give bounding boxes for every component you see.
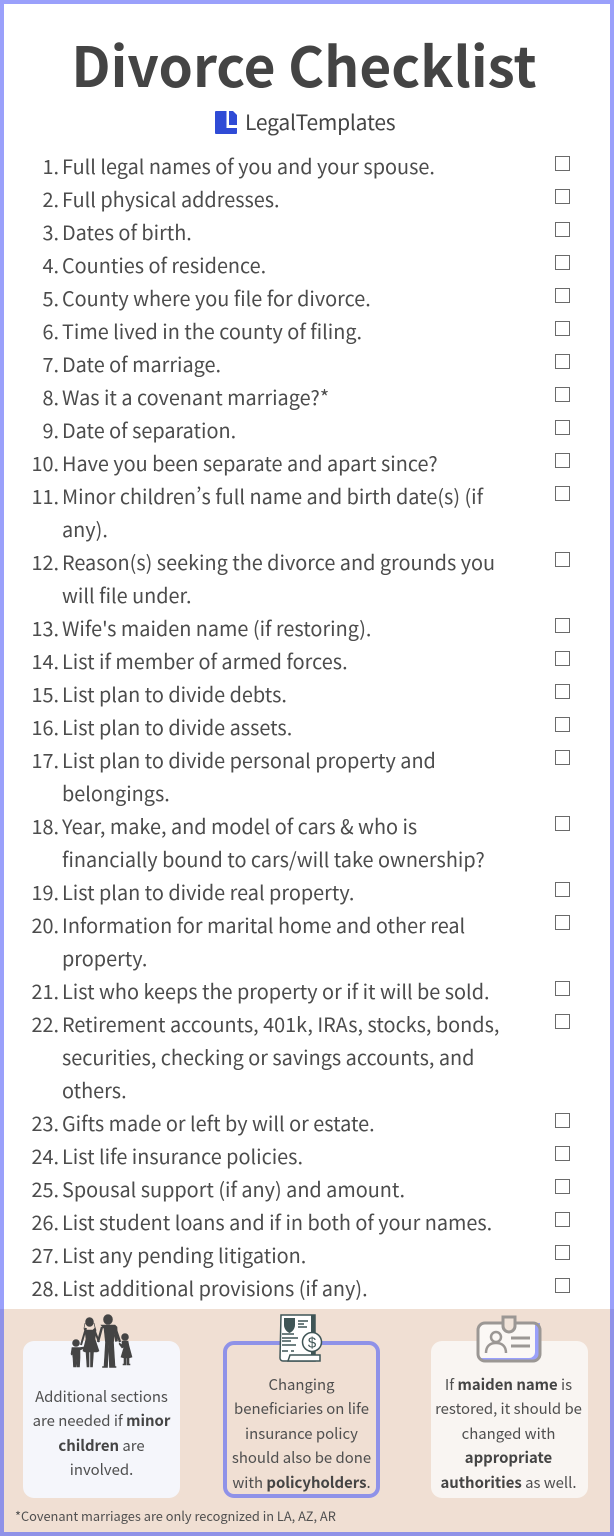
item 2 [42, 184, 570, 213]
checklist: 26. [31, 1207, 59, 1236]
checklist: Time lived in the county of filing. [62, 316, 362, 345]
item 10 [31, 448, 570, 477]
checklist: Counties of residence. [62, 250, 266, 279]
checklist: 9. [42, 415, 59, 444]
title: Divorce Checklist [71, 23, 537, 103]
item 12 [31, 547, 570, 609]
text: maiden name: restored, it should be [435, 1398, 582, 1419]
checklist: List any pending litigation. [62, 1240, 306, 1269]
checklist: List plan to divide debts. [62, 679, 287, 708]
checklist: Have you been separate and apart since? [62, 448, 438, 477]
checklist: Spousal support (if any) and amount. [62, 1174, 405, 1203]
text: beneficiaries: Changing [268, 1374, 334, 1394]
checklist: Reason(s) seeking the divorce and grounds you [62, 547, 495, 576]
icon: logo mark [215, 111, 237, 134]
text: beneficiaries: insurance policy [245, 1422, 358, 1444]
panel: bottom notes [0, 1309, 614, 1536]
checklist: 11. [31, 481, 59, 510]
checklist: Date of marriage. [62, 349, 221, 378]
checklist: financially bound to cars/will take ownership? [62, 844, 485, 873]
checklist: 2. [42, 184, 59, 213]
text: maiden name [435, 1374, 582, 1492]
text: beneficiaries: with policyholders. [232, 1472, 371, 1492]
item 28 [31, 1273, 570, 1302]
checklist: Wife's maiden name (if restoring). [62, 613, 371, 642]
item 18 [31, 811, 570, 873]
checklist: 25. [31, 1174, 59, 1203]
checklist: securities, checking or savings accounts, and [62, 1042, 474, 1071]
checklist: 22. [31, 1009, 59, 1038]
checklist: 23. [31, 1108, 59, 1137]
checklist: List plan to divide assets. [62, 712, 292, 741]
checklist: List additional provisions (if any). [62, 1273, 368, 1302]
item 27 [31, 1240, 570, 1269]
text: maiden name: If maiden name is [445, 1374, 572, 1394]
text: beneficiaries: beneficiaries on life [234, 1398, 369, 1419]
item 15 [31, 679, 570, 708]
checklist: Was it a covenant marriage?* [62, 382, 329, 411]
checklist: 6. [42, 316, 59, 345]
item 5 [42, 283, 570, 312]
checklist: List who keeps the property or if it will be sold. [62, 976, 490, 1005]
item 21 [31, 976, 570, 1005]
checklist: 20. [31, 910, 59, 939]
item 19 [31, 877, 570, 906]
checklist: Information for marital home and other real [62, 910, 465, 939]
logo: LegalTemplates [215, 107, 395, 137]
page border: lower darker section [0, 1309, 614, 1536]
checklist: will file under. [62, 580, 191, 609]
checklist: others. [62, 1075, 127, 1104]
item 24 [31, 1141, 570, 1170]
checklist: Minor children’s full name and birth date(s) (if [62, 481, 483, 510]
item 8 [42, 382, 570, 411]
logo text: LegalTemplates [245, 107, 395, 137]
checklist: List student loans and if in both of your names. [62, 1207, 492, 1236]
item 16 [31, 712, 570, 741]
item 20 [31, 910, 570, 972]
checklist: County where you file for divorce. [62, 283, 371, 312]
item 11 [31, 481, 570, 543]
text: minor children: are needed if minor [33, 1410, 170, 1431]
checklist: 27. [31, 1240, 59, 1269]
checklist: Full physical addresses. [62, 184, 280, 213]
checklist: 14. [31, 646, 59, 675]
panel: life insurance card [223, 1341, 380, 1498]
checklist: 7. [42, 349, 59, 378]
icon: insurance policy document [279, 1314, 322, 1362]
checklist: List life insurance policies. [62, 1141, 303, 1170]
checklist: 16. [31, 712, 59, 741]
footnote: *Covenant marriages are only recognized in LA, AZ, AR [15, 1506, 336, 1525]
text: minor children: children are [58, 1434, 145, 1456]
checklist: 4. [42, 250, 59, 279]
checklist: property. [62, 943, 147, 972]
checklist: 24. [31, 1141, 59, 1170]
checklist: Year, make, and model of cars & who is [62, 811, 417, 840]
text: maiden name: authorities as well. [440, 1472, 576, 1492]
item 13 [31, 613, 570, 642]
checklist: Retirement accounts, 401k, IRAs, stocks, bonds, [62, 1009, 499, 1038]
checklist: 10. [31, 448, 59, 477]
item 3 [42, 217, 570, 246]
text: minor children: involved. [70, 1459, 133, 1480]
text: minor children: Additional sections [35, 1386, 168, 1406]
icon: insurance policy document: $ [308, 1334, 317, 1352]
text: minor children [33, 1386, 170, 1480]
item 1 [42, 151, 570, 180]
item 25 [31, 1174, 570, 1203]
checklist [31, 151, 570, 1302]
checklist: Date of separation. [62, 415, 236, 444]
text: beneficiaries: should also be done [232, 1447, 371, 1468]
item 7 [42, 349, 570, 378]
checklist: Full legal names of you and your spouse. [62, 151, 435, 180]
icon: id badge [476, 1316, 542, 1362]
item 14 [31, 646, 570, 675]
item 9 [42, 415, 570, 444]
icon: family silhouette [70, 1314, 132, 1368]
checklist: List plan to divide personal property and [62, 745, 436, 774]
checklist: 8. [42, 382, 59, 411]
checklist: belongings. [62, 778, 170, 807]
text: beneficiaries [232, 1374, 371, 1492]
checklist: 13. [31, 613, 59, 642]
checklist: any). [62, 514, 108, 543]
checklist: Dates of birth. [62, 217, 192, 246]
text: maiden name: changed with [462, 1422, 555, 1444]
item 4 [42, 250, 570, 279]
checklist: 19. [31, 877, 59, 906]
checklist: 1. [42, 151, 59, 180]
checklist: Gifts made or left by will or estate. [62, 1108, 375, 1137]
item 22 [31, 1009, 570, 1104]
checklist: List plan to divide real property. [62, 877, 354, 906]
checklist: 21. [31, 976, 59, 1005]
item 23 [31, 1108, 570, 1137]
checklist: List if member of armed forces. [62, 646, 348, 675]
checklist: 17. [31, 745, 59, 774]
item 26 [31, 1207, 570, 1236]
checklist: 12. [31, 547, 59, 576]
checklist: 3. [42, 217, 59, 246]
panel: maiden name card [431, 1341, 588, 1498]
checklist: 15. [31, 679, 59, 708]
panel: minor children card [23, 1341, 180, 1498]
text: maiden name: appropriate [465, 1447, 552, 1468]
item 17 [31, 745, 570, 807]
checklist: 28. [31, 1273, 59, 1302]
item 6 [42, 316, 570, 345]
checklist: 18. [31, 811, 59, 840]
checklist: 5. [42, 283, 59, 312]
